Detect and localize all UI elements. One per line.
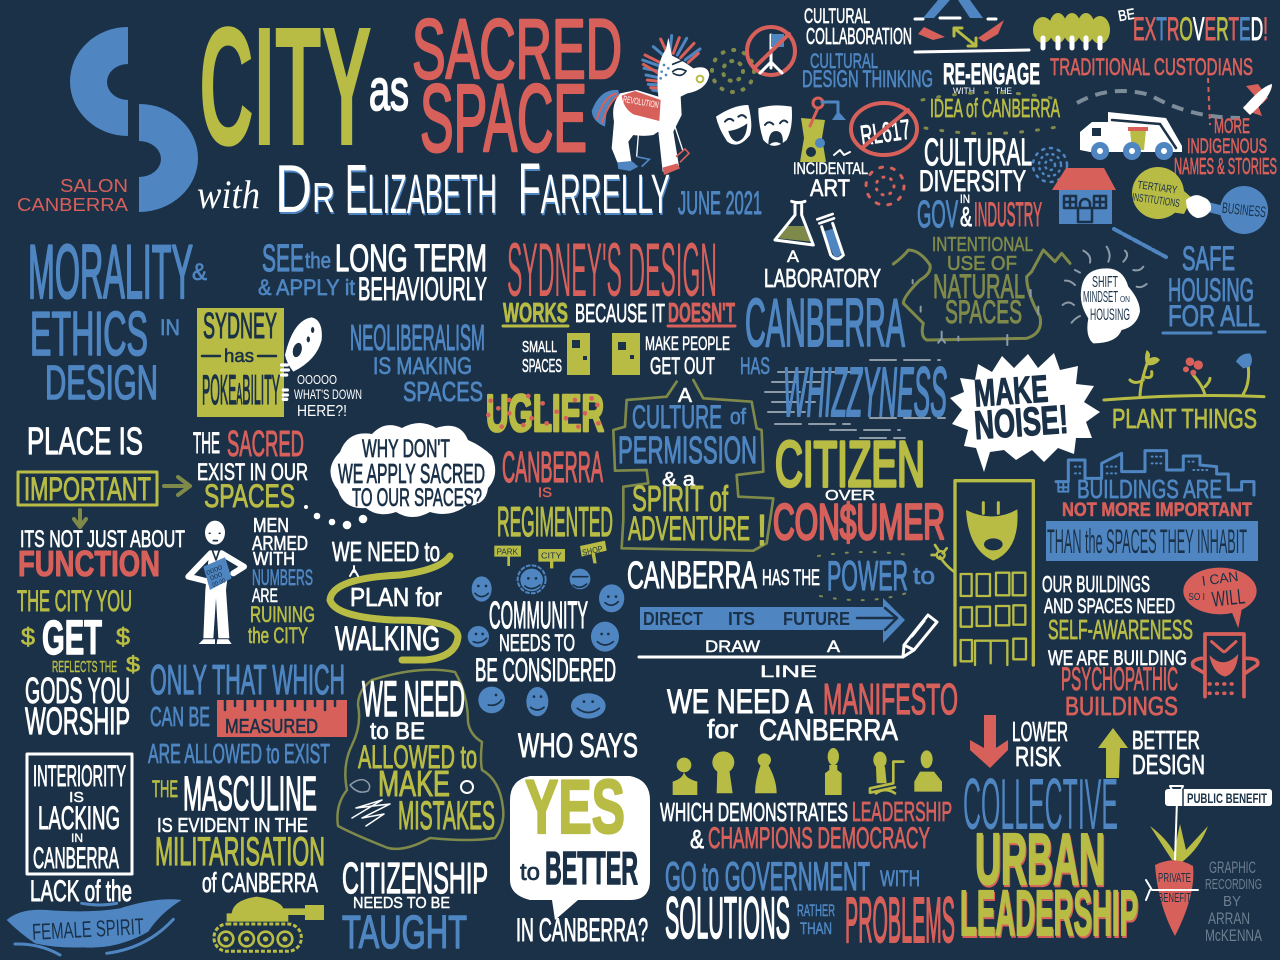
text block: masculine militarisation [152, 768, 325, 898]
text block: men armed with numbers: ARMED [252, 533, 308, 555]
callout: yes to better: to [520, 859, 540, 886]
text block: citizenship needs to be taught [342, 854, 488, 958]
heading: morality and ethics in design: & [192, 259, 207, 286]
icon: ghost [282, 317, 322, 399]
text block: solutions rather than problems: GO to GOVERNMENT [665, 855, 870, 899]
text block: uglier Canberra is regimented: IS [538, 484, 552, 500]
heading: Canberra has whizzyness: HAS [740, 353, 770, 380]
panel: culture of permission: & a [662, 469, 696, 491]
text block: only that which can be measured: ARE ALLOWED to EXIST [148, 738, 330, 769]
logo: Salon Canberra: CANBERRA [17, 195, 128, 215]
text block: place is important: PLACE IS [27, 421, 143, 463]
icon: crossed-out flag [747, 27, 795, 75]
heading: morality and ethics in design: ETHICS [30, 300, 148, 369]
text block: we need a manifesto [667, 675, 958, 747]
text block: Canberra has the power to: CANBERRA [627, 555, 757, 597]
icon: flasks [775, 201, 843, 259]
panel: allowed to make mistakes [337, 670, 503, 849]
panel: intentional use of natural spaces [893, 234, 1070, 345]
text block: better design: DESIGN [1132, 749, 1205, 780]
text block: draw a line with pencil: LINE [760, 662, 817, 681]
callout: make noise: NOISE! [973, 398, 1070, 448]
callout: why don't we apply sacred: WHY DON'T [362, 435, 450, 463]
text: PROBLEMS [845, 884, 955, 956]
icon: plants [1104, 350, 1264, 400]
icon: revolution unicorn [592, 36, 709, 175]
text block: safe housing for all: SAFE [1182, 240, 1235, 278]
text block: works because it doesn't: WORKS [503, 297, 568, 328]
panel: culture of permission: CULTURE [632, 399, 722, 435]
text block: re-engage with the idea of Canberra: RE-ENGAGE [943, 58, 1040, 91]
icon: tertiary institutions shake hands with business: TERTIARY [1137, 179, 1178, 197]
text block: what's down here [294, 372, 362, 420]
icon: evil building [1193, 634, 1258, 697]
text block: Canberra has the power to: to [913, 563, 935, 590]
text block: buildings are not more important [1046, 474, 1258, 561]
text block: the sacred exist in our spaces: EXIST IN OUR [197, 459, 308, 486]
text block: cultural collaboration: COLLABORATION [806, 23, 912, 49]
panel: allowed to make mistakes: to BE [370, 718, 425, 745]
icon: tertiary institutions shake hands with business [1131, 167, 1268, 234]
icon: blue firework [1033, 148, 1067, 182]
heading: morality and ethics in design [28, 230, 207, 410]
text block: incidental art [793, 159, 868, 202]
icon: community faces [468, 565, 624, 719]
text block: demonstrates leadership: WHICH DEMONSTRATES [660, 797, 848, 827]
text block: cultural diversity in government and industry: CULTURAL [924, 132, 1032, 174]
text block: lower risk: RISK [1015, 741, 1061, 772]
text block: draw a line with pencil [639, 615, 937, 681]
text block: uglier Canberra is regimented: UGLIER [486, 385, 604, 443]
text block: cultural collaboration: CULTURAL [810, 50, 878, 73]
text block: not just about function: FUNCTION [18, 543, 160, 584]
text block: the sacred exist in our spaces: THE [193, 427, 220, 460]
text block: community needs to be considered: BE CONSIDERED [475, 652, 616, 688]
text block: works because it doesn't: SPACES [522, 356, 562, 376]
icon: man with numbers: 00.00 [211, 577, 227, 589]
panel: Sydney has pokeability: has [224, 346, 254, 366]
icon: head shift mindset on housing: SHIFT [1092, 274, 1118, 291]
text block: men armed with numbers: WITH [253, 549, 295, 569]
panel: interiority is lacking [27, 754, 132, 875]
panel: culture of permission: PERMISSION [618, 430, 757, 472]
text block: only that which can be measured: MEASURED [225, 716, 318, 738]
text block: we need to plan for walking: WE NEED to [332, 536, 440, 567]
text block: see the long term: LONG TERM [335, 238, 487, 280]
callout: I can so I will: WILL [1211, 584, 1246, 612]
text: NEOLIBERALISM [350, 317, 485, 358]
callout: make noise: MAKE [973, 368, 1050, 415]
text block: the city you get: GET [42, 612, 102, 665]
text block: we need to plan for walking [330, 536, 458, 660]
icon: carrot public and private benefit: BENEFIT [1158, 890, 1191, 905]
text block: see the long term: & APPLY it [258, 275, 355, 300]
icon: man with numbers [188, 521, 244, 644]
icon: park city shop tags: PARK [497, 546, 518, 556]
text block: more indigenous names and stories: MORE [1214, 115, 1250, 138]
logo: Salon Canberra [17, 27, 198, 215]
callout: yes to better [510, 765, 650, 920]
text block: works because it doesn't: SMALL [522, 339, 557, 356]
text block: incidental art: INCIDENTAL [793, 159, 868, 178]
text block: citizen over consumer: OVER [825, 487, 875, 504]
panel: Sydney has pokeability [197, 305, 284, 417]
panel: intentional use of natural spaces: NATURAL [933, 268, 1025, 306]
text block: re-engage with the idea of Canberra: WITH [953, 86, 975, 96]
text block: works because it doesn't: BECAUSE IT [575, 298, 665, 328]
logo: Salon Canberra: SALON [60, 176, 128, 196]
text block: cultural diversity in government and industry: IN [960, 192, 970, 206]
text block: draw a line with pencil: DRAW [705, 637, 760, 656]
icon: head shift mindset on housing: HOUSING [1090, 305, 1130, 324]
icon: man with numbers: 000 [209, 571, 224, 583]
text block: buildings need self-awareness: WE ARE BUILDING [1048, 647, 1187, 670]
title: FARRELLY [518, 149, 670, 229]
text block: neoliberalism [350, 317, 485, 407]
heading: Canberra has whizzyness [740, 285, 947, 438]
text block: solutions rather than problems [665, 855, 955, 956]
text block: buildings need self-awareness: OUR BUILDINGS [1042, 571, 1150, 597]
text block: incidental art: ART [810, 175, 850, 202]
text block: not just about function [18, 526, 185, 584]
text block: we need a manifesto: WE NEED A [667, 683, 813, 721]
heading: Canberra has whizzyness: CANBERRA [745, 285, 905, 361]
text block: masculine militarisation: of CANBERRA [202, 867, 318, 898]
text block: demonstrates leadership: LEADERSHIP [852, 796, 952, 827]
text block: better design [1132, 725, 1205, 780]
arrow: important to sacred [164, 477, 190, 495]
text block: cultural diversity in government and industry: & [960, 201, 972, 232]
text: INDUSTRY [974, 196, 1042, 234]
title: DR [275, 151, 335, 227]
icon: carrot public and private benefit: PRIVATE [1158, 870, 1191, 885]
arrow: better design [1098, 728, 1128, 778]
callout: why don't we apply sacred [304, 423, 495, 529]
panel: allowed to make mistakes: MAKE [378, 763, 450, 804]
text block: works because it doesn't [503, 297, 735, 380]
text block: solutions rather than problems: THAN [800, 919, 832, 938]
text block: solutions rather than problems: SOLUTIONS [665, 886, 790, 951]
text block: citizen over consumer: CITIZEN [775, 428, 925, 500]
text block: safe housing for all [1163, 240, 1265, 333]
text block: a laboratory: A [787, 247, 800, 266]
callout: yes to better: BETTER [545, 842, 638, 894]
text block: the city you get: $ [21, 624, 35, 651]
text block: only that which can be measured: ONLY THAT WHICH [150, 656, 345, 703]
text block: cultural collaboration [802, 5, 933, 93]
text block: a laboratory: LABORATORY [764, 263, 881, 293]
icon: park city shop tags: SHOP [581, 543, 604, 558]
text block: we need a manifesto: for [707, 714, 738, 744]
panel: allowed to make mistakes: WE NEED [362, 671, 465, 727]
text block: buildings need self-awareness: AND SPACES NEED [1044, 595, 1175, 618]
text block: lack of the: LACK of the [30, 875, 132, 908]
icon: tank [214, 897, 324, 951]
text block: buildings need self-awareness: BUILDINGS [1065, 691, 1178, 721]
text block: solutions rather than problems: RATHER [797, 901, 835, 920]
text block: buildings are not more important: NOT MORE IMPORTANT [1062, 500, 1252, 521]
text block: what's down here: HERE?! [297, 403, 347, 420]
icon: head shift mindset on housing [1063, 247, 1147, 343]
panel: culture of permission: ! [757, 506, 767, 555]
icon: masks [716, 105, 792, 146]
text block: draw a line with pencil: A [827, 637, 841, 656]
callout: why don't we apply sacred: TO OUR SPACES? [352, 484, 482, 512]
text block: demonstrates leadership: & [690, 824, 704, 854]
panel: interiority is lacking: CANBERRA [33, 842, 119, 875]
text block: uglier Canberra is regimented [486, 385, 613, 545]
icon: incidental art vase [800, 98, 850, 162]
icon: park city shop tags [494, 541, 607, 568]
text: WHIZZYNESS [783, 353, 947, 431]
icon: happy building [932, 481, 1033, 665]
icon: yellow firework [712, 50, 754, 92]
callout: make noise [950, 353, 1100, 472]
text block: neoliberalism: IS MAKING [373, 353, 472, 380]
title: with [197, 172, 260, 217]
arrow: direct its future [640, 598, 905, 643]
text block: better design: BETTER [1132, 725, 1200, 755]
text block: re-engage with the idea of Canberra: IDEA of CANBERRA [930, 93, 1060, 123]
icon: house with padlock [1052, 168, 1116, 224]
panel: culture of permission: of [730, 404, 747, 429]
panel: culture of permission [613, 380, 773, 555]
text block: the sacred exist in our spaces [193, 423, 308, 514]
panel: allowed to make mistakes: ALLOWED to [358, 739, 477, 775]
text block: more indigenous names and stories [1174, 115, 1277, 179]
text block: works because it doesn't: MAKE PEOPLE [645, 334, 730, 355]
callout: I can so I will [1183, 568, 1257, 628]
text block: men armed with numbers [248, 515, 315, 648]
panel: interiority is lacking: INTERIORITY [33, 760, 126, 793]
text block: citizenship needs to be taught: CITIZENSHIP [342, 854, 488, 903]
text: MORALITY [28, 230, 193, 315]
panel: interiority is lacking: IN [71, 831, 83, 845]
decorative dashed line [1114, 229, 1166, 257]
text block: masculine militarisation: IS EVIDENT IN THE [157, 815, 308, 837]
text block: who says: WHO SAYS [518, 727, 638, 765]
heading: collective urban leadership [960, 765, 1138, 949]
arrow: direct its future: ITS [728, 609, 755, 629]
arrow: lower risk [970, 715, 1008, 768]
banner: female spirit [7, 899, 182, 955]
text block: only that which can be measured: CAN BE [150, 701, 210, 732]
icon: park city shop tags: CITY [541, 550, 562, 560]
text block: the city you get: REFLECTS THE [52, 659, 117, 676]
text block: citizenship needs to be taught: NEEDS TO BE [353, 895, 450, 912]
callout: why don't we apply sacred: WE APPLY SACRED [338, 458, 485, 489]
text block: lower risk: LOWER [1012, 716, 1068, 747]
panel: culture of permission: SPIRIT of [632, 478, 729, 519]
icon: row of trees [1033, 13, 1110, 48]
panel: allowed to make mistakes: MISTAKES [398, 794, 495, 838]
callout: yes to better: YES [525, 765, 625, 850]
text: CANBERRA [502, 443, 603, 492]
text block: community needs to be considered: NEEDS TO [499, 630, 575, 657]
panel: Sydney has pokeability: SYDNEY [203, 305, 277, 346]
text: SYDNEY'S DESIGN [507, 228, 717, 313]
icon: skyline [1056, 451, 1254, 495]
title: ELIZABETH [345, 150, 497, 228]
text block: men armed with numbers: MEN [253, 515, 289, 537]
arrow: direct its future: DIRECT [643, 609, 703, 629]
text block: re-engage with the idea of Canberra: THE [995, 86, 1012, 96]
text block: masculine militarisation: MASCULINE [183, 768, 317, 821]
text block: citizen over consumer [773, 428, 945, 550]
text block: the sacred exist in our spaces: SACRED [227, 423, 304, 464]
text block: cultural collaboration: DESIGN THINKING [802, 66, 933, 93]
text block: community needs to be considered: COMMUNITY [489, 595, 588, 637]
icon: walking legs [915, 0, 1029, 52]
icon: carrot public and private benefit [1146, 786, 1272, 936]
arrow: important to function [74, 510, 86, 527]
text block: men armed with numbers: the CITY [248, 623, 308, 648]
text block: see the long term: the [305, 248, 331, 273]
text block: graphic recording credit: BY [1223, 893, 1241, 910]
text block: we need a manifesto: MANIFESTO [823, 675, 958, 724]
icon: crossed-out RL617: RL617 [858, 114, 912, 151]
icon: plane with dashed route [1077, 78, 1272, 125]
text block: we need a manifesto: CANBERRA [759, 714, 898, 747]
text block: works because it doesn't: GET OUT [650, 353, 715, 380]
text block: masculine militarisation: MILITARISATION [155, 830, 325, 874]
text block: the city you get [17, 585, 140, 743]
text block: citizen over consumer: CON$UMER [773, 494, 945, 550]
text block: buildings are not more important: BUILDINGS ARE [1077, 474, 1222, 504]
text block: the city you get: WORSHIP [25, 701, 130, 743]
text block: masculine militarisation: THE [152, 776, 178, 803]
text block: men armed with numbers: ARE [252, 586, 278, 607]
text block: men armed with numbers: NUMBERS [252, 565, 313, 590]
text block: men armed with numbers: RUINING [250, 602, 315, 627]
panel: culture of permission: A [678, 385, 693, 407]
text block: neoliberalism: SPACES [403, 376, 483, 407]
title: as [369, 58, 409, 123]
text block: community needs to be considered [475, 595, 616, 688]
text block: graphic recording credit: ARRAN [1208, 909, 1250, 928]
icon: doors [567, 333, 640, 375]
text block: see the long term [258, 238, 487, 307]
text block: cultural collaboration: CULTURAL [804, 5, 870, 28]
panel: culture of permission: ADVENTURE [628, 510, 750, 548]
text block: citizenship needs to be taught: TAUGHT [342, 906, 467, 958]
text block: the city you get: THE CITY YOU [17, 585, 132, 618]
title: SPACE [420, 65, 587, 172]
text block: in Canberra?: IN CANBERRA? [516, 912, 648, 948]
heading: morality and ethics in design: DESIGN [45, 357, 158, 410]
text block: see the long term: SEE [262, 238, 304, 280]
panel: intentional use of natural spaces: INTENTIONAL [932, 234, 1033, 256]
text block: we need to plan for walking: WALKING [335, 620, 440, 658]
text block: a laboratory [764, 247, 881, 293]
icon: head shift mindset on housing: ON [1120, 295, 1130, 304]
text block: what's down here: OOOOO [297, 372, 337, 387]
text block: place is important [18, 421, 157, 507]
text: POKEABILITY [202, 366, 280, 413]
text block: works because it doesn't: DOESN'T [668, 297, 735, 328]
text block: graphic recording credit [1205, 858, 1262, 945]
heading: be extroverted: EXTROVERTED! [1133, 11, 1268, 47]
banner: female spirit: FEMALE SPIRIT [31, 913, 145, 945]
text block: Canberra has the power to [627, 552, 935, 600]
arrow: direct its future: FUTURE [783, 609, 850, 629]
text block: see the long term: BEHAVIOURLY [358, 271, 487, 307]
icon: crossed-out RL617 [851, 103, 917, 155]
text block: cultural diversity in government and industry: DIVERSITY [919, 165, 1026, 198]
title: SACRED [412, 2, 622, 96]
panel: intentional use of natural spaces: USE OF [947, 253, 1017, 275]
text: REGIMENTED [497, 498, 613, 545]
text block: buildings need self-awareness [1042, 571, 1193, 721]
text block: not just about function: ITS NOT JUST ABOUT [20, 526, 185, 553]
icon: head shift mindset on housing: MINDSET [1083, 289, 1118, 306]
heading: be extroverted: BE [1117, 6, 1137, 25]
text block: re-engage with the idea of Canberra [922, 58, 1062, 134]
text block: what's down here: WHAT'S DOWN [294, 386, 362, 402]
text block: only that which can be measured [148, 656, 347, 769]
icon: tertiary institutions shake hands with business: INSTITUTIONS [1131, 191, 1180, 210]
icon: man with numbers: 0000 [206, 564, 224, 577]
heading: morality and ethics in design: IN [160, 315, 180, 340]
text block: the city you get: $ [126, 652, 140, 677]
icon: red firework [866, 167, 904, 205]
callout: I can so I will: SO I [1188, 592, 1205, 603]
text block: demonstrates leadership [660, 796, 952, 855]
text block: Canberra has the power to: POWER [827, 552, 908, 599]
text block: we need to plan for walking: PLAN for [350, 582, 442, 612]
text block: demonstrates leadership: CHAMPIONS DEMOCRACY [708, 822, 930, 855]
panel: interiority is lacking: IS [69, 789, 84, 806]
text block: lower risk [1012, 716, 1068, 772]
text block: Canberra has the power to: HAS THE [762, 565, 820, 590]
text block: solutions rather than problems: WITH [880, 866, 920, 891]
icon: bin truck [1080, 112, 1182, 160]
heading: collective urban leadership: URBAN [975, 820, 1105, 900]
text block: the city you get: $ [116, 624, 130, 651]
title: JUNE 2021 [678, 185, 762, 221]
icon: revolution unicorn: REVOLUTION [622, 94, 659, 110]
text block: cultural diversity in government and industry: GOV [917, 194, 958, 236]
title [197, 0, 762, 229]
panel: interiority is lacking: LACKING [38, 800, 120, 836]
text block: the sacred exist in our spaces: SPACES [204, 478, 295, 514]
text block: place is important: IMPORTANT [24, 471, 151, 507]
icon: people [673, 748, 942, 795]
panel: intentional use of natural spaces: SPACES [945, 294, 1022, 330]
callout: I can so I will: I CAN [1201, 568, 1239, 589]
text block: cultural diversity in government and industry [917, 132, 1042, 236]
text block: the city you get: GODS YOU [25, 670, 130, 711]
